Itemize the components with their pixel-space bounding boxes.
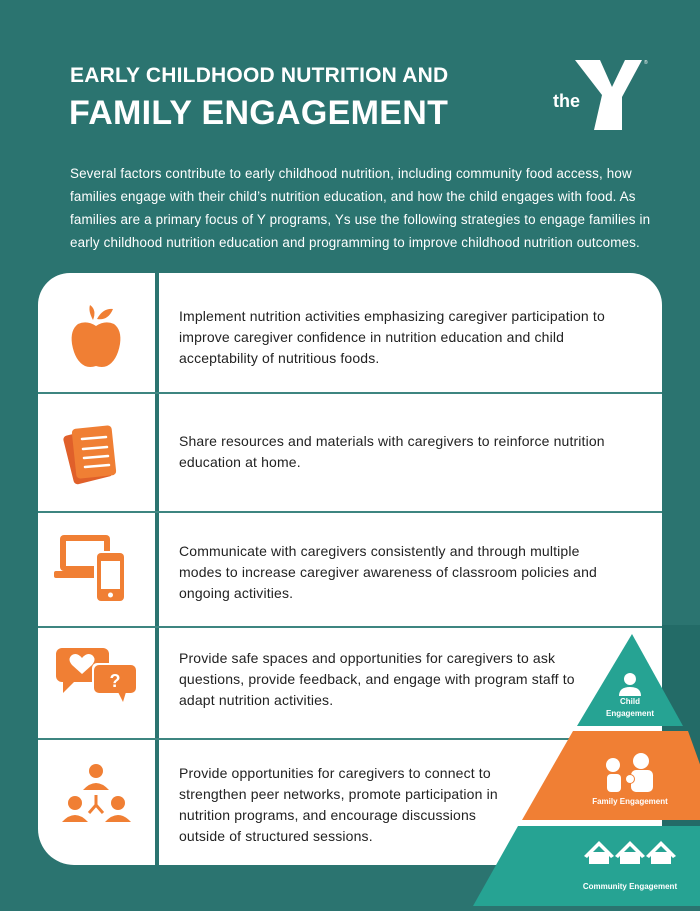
icon: speech bubbles: ?: [110, 671, 120, 691]
text: row 2: Share resources and materials with caregivers to reinforce nutrition education at home.: [179, 433, 605, 470]
text: row 3: Communicate with caregivers consistently and through multiple: [179, 543, 580, 559]
icon: laptop and phone: [54, 535, 124, 601]
logo: the Y: [553, 59, 648, 130]
text: row 1: Implement nutrition activities emphasizing caregiver participation to improve caregiver confidence in nutrition education and child acceptability of nutritious foods.: [179, 308, 605, 366]
icon: speech bubbles: [56, 648, 136, 702]
text: row 4: Provide safe spaces and opportunities for caregivers to ask questions, provide feedback, and engage with program staff to adapt nutrition activities.: [179, 650, 575, 708]
pyramid: child engagement: Child: [620, 697, 640, 706]
icon: network of people: [62, 764, 131, 822]
pyramid: family engagement: Family Engagement: [592, 797, 668, 806]
panel: strategies: [38, 273, 662, 865]
logo: the Y: ®: [644, 59, 648, 66]
title: [69, 64, 448, 132]
text: row 5: Provide opportunities for caregivers to connect to strengthen peer networks, promote participation in nutrition programs, and encourage discussions outside of structured sessions.: [179, 765, 498, 844]
text: row 3: modes to increase caregiver awareness of classroom policies and: [179, 564, 597, 580]
pyramid: child engagement: Engagement: [606, 709, 654, 718]
intro paragraph: Several factors contribute to early childhood nutrition, including community food access, how families engage with their child’s nutrition education, and how the child engages with food. As families are a primary focus of Y programs, Ys use the following strategies to engage families in early childhood nutrition education and programming to improve childhood nutrition outcomes.: [70, 166, 650, 250]
pyramid: family engagement: [522, 731, 700, 820]
icon: documents: [63, 426, 116, 484]
pyramid: child engagement: [577, 634, 683, 726]
text: row 3: ongoing activities.: [179, 585, 293, 601]
pyramid: community engagement: Community Engagement: [583, 882, 677, 891]
title: EARLY CHILDHOOD NUTRITION AND: [70, 64, 448, 87]
text: row 3: [179, 543, 597, 601]
pyramid: community engagement: [473, 826, 700, 906]
logo: the Y: the: [553, 91, 580, 111]
title: FAMILY ENGAGEMENT: [69, 94, 448, 132]
pyramid: [473, 625, 700, 906]
icon: apple: [72, 305, 120, 367]
